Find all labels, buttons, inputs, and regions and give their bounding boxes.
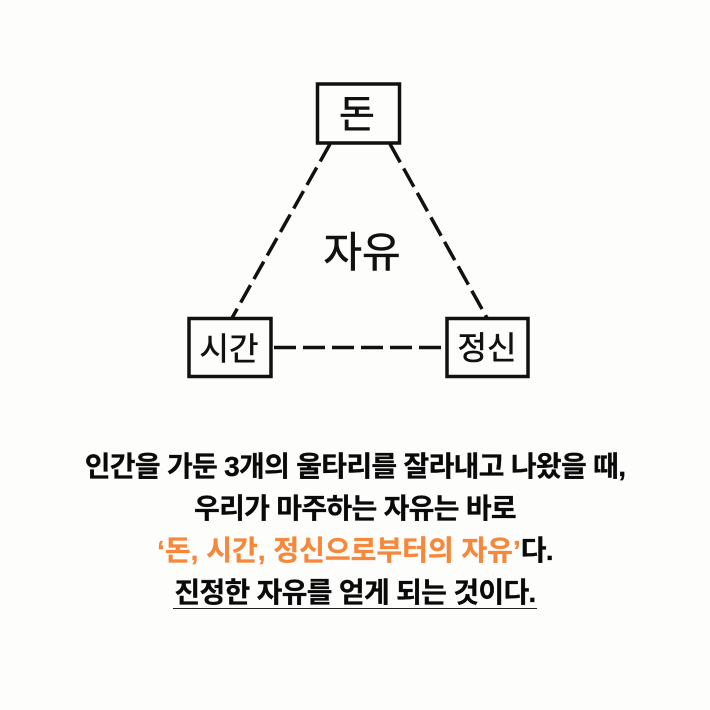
box: money: 돈 bbox=[339, 84, 375, 140]
caption line 3 with orange highlight: ‘돈, 시간, 정신으로부터의 자유’다. bbox=[157, 535, 553, 566]
caption line 2: 우리가 마주하는 자유는 바로 bbox=[194, 493, 516, 524]
box: time bbox=[189, 318, 271, 376]
triangle diagram bbox=[187, 82, 530, 378]
caption text bbox=[85, 451, 625, 609]
box: mind bbox=[447, 318, 528, 376]
box: time: 시간 bbox=[200, 324, 258, 370]
dashed line: time to mind bbox=[274, 346, 446, 349]
caption line 1: 인간을 가둔 3개의 울타리를 잘라내고 나왔을 때, bbox=[85, 451, 625, 482]
box: mind: 정신 bbox=[458, 323, 516, 369]
dashed line: money to mind bbox=[390, 144, 487, 318]
dashed line: money to time bbox=[232, 144, 330, 318]
box: money bbox=[318, 84, 400, 143]
caption line 4 underlined: 진정한 자유를 얻게 되는 것이다. bbox=[174, 577, 536, 608]
label: freedom: 자유 bbox=[323, 219, 401, 280]
